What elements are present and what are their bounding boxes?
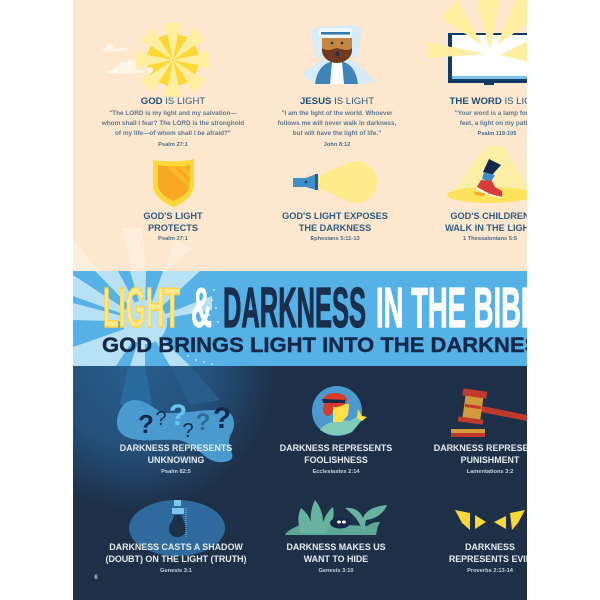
text block: the Word is light: "Your word is a lamp for my	[455, 110, 540, 117]
text block: darkness represents foolishness	[280, 444, 392, 473]
icon: question marks on blob: ?	[182, 420, 194, 442]
text block: darkness represents foolishness: Ecclesiastes 2:14	[312, 469, 360, 475]
icon: question marks on blob: ?	[196, 409, 210, 436]
text block: the Word is light: Psalm 119:105	[478, 131, 516, 137]
text block: darkness represents punishment: DARKNESS REPRESENTS	[434, 443, 546, 453]
text block: God is light: "The LORD is my light and my salvation—	[109, 110, 237, 117]
text block: God's children walk in the light: GOD'S CHILDREN	[450, 211, 530, 221]
text block: darkness makes us want to hide	[287, 544, 386, 572]
text block: darkness casts a shadow: Genesis 3:1	[160, 568, 192, 574]
text block: God is light	[101, 96, 244, 148]
text block: darkness represents punishment	[434, 444, 527, 473]
panel: light section background	[73, 0, 527, 271]
icon: walking foot in light	[447, 146, 533, 203]
icon: question marks on blob: ?	[213, 402, 231, 435]
icon: Jesus	[302, 25, 376, 84]
text block: darkness represents unknowing: UNKNOWING	[148, 455, 204, 465]
text block: God's light protects	[144, 212, 202, 240]
icon: question marks on blob: ?	[155, 408, 167, 430]
text block: darkness makes us want to hide: Genesis 3:10	[318, 568, 354, 574]
text block: darkness represents punishment: PUNISHMENT	[461, 455, 520, 465]
icon: gavel	[451, 388, 527, 437]
text block: Jesus is light: follows me will never walk in darkness,	[278, 120, 397, 127]
icon: question marks on blob	[117, 399, 234, 462]
text block: the Word is light: feet, a light on my path."	[460, 120, 534, 127]
icon: yellow evil eyes	[455, 510, 525, 530]
subtitle: GOD BRINGS LIGHT INTO THE DARKNESS	[102, 333, 554, 357]
text block: the Word is light	[450, 98, 527, 135]
text block: darkness casts a shadow: (DOUBT) ON THE LIGHT (TRUTH)	[106, 554, 247, 564]
text block: darkness represents unknowing: Psalm 82:5	[161, 469, 191, 475]
text block: the Word is light: THE WORD IS LIGHT	[450, 96, 545, 107]
title: Light and Darkness in the Bible	[104, 286, 527, 328]
text block: darkness makes us want to hide: DARKNESS MAKES US	[286, 542, 386, 552]
text block: God's light protects: GOD'S LIGHT	[143, 211, 203, 221]
text block: darkness represents unknowing: DARKNESS REPRESENTS	[120, 443, 232, 453]
icon: sun	[100, 23, 210, 97]
panel: faint rays rising into the light section	[73, 228, 192, 271]
text block: darkness casts a shadow	[106, 544, 246, 572]
text block: God's light exposes the darkness: GOD'S LIGHT EXPOSES	[282, 211, 388, 221]
text block: darkness represents evil	[449, 544, 527, 572]
title: Light and Darkness in the Bible: &	[191, 276, 212, 340]
title: Light and Darkness in the Bible: LIGHT	[103, 276, 180, 340]
icon: shadow of a light bulb	[129, 500, 225, 556]
text block: God's children walk in the light: WALK IN THE LIGHT	[445, 223, 535, 233]
text block: God's light exposes the darkness: Ephesians 5:11-13	[310, 236, 360, 242]
text block: God's light exposes the darkness	[282, 211, 388, 242]
icon: question marks on blob: ?	[169, 399, 187, 432]
text block: God is light: of my life—of whom shall I be afraid?"	[115, 130, 231, 137]
page number: 6	[94, 575, 98, 581]
text block: God's light protects: Psalm 27:1	[158, 236, 188, 242]
text block: darkness casts a shadow: DARKNESS CASTS A SHADOW	[109, 542, 243, 552]
text block: darkness represents evil: REPRESENTS EVIL	[449, 554, 532, 564]
text block: darkness represents evil: Proverbs 2:13-14	[467, 568, 514, 574]
text block: God's light protects: PROTECTS	[148, 223, 198, 233]
text block: God's light exposes the darkness: THE DARKNESS	[299, 223, 371, 233]
icon: eyes hiding in bushes	[285, 500, 387, 535]
icon: open book with rays	[427, 0, 538, 85]
decorative stipple near ampersand	[187, 289, 219, 365]
icon: foolish man with blindfold	[312, 386, 367, 436]
text block: Jesus is light: "I am the light of the world. Whoever	[282, 110, 393, 117]
panel: title banner	[73, 271, 556, 366]
text block: God's children walk in the light: 1 Thessalonians 5:5	[463, 236, 517, 242]
text block: God's children walk in the light	[445, 212, 527, 240]
icon: question marks on blob: ?	[138, 409, 154, 439]
text block: Jesus is light: but will have the light of life."	[293, 130, 381, 137]
text block: Jesus is light: JESUS IS LIGHT	[300, 96, 374, 107]
panel: darkness section background	[73, 366, 527, 600]
text block: God is light: Psalm 27:1	[158, 142, 188, 148]
text block: darkness represents punishment: Lamentations 3:2	[467, 469, 513, 475]
icon: clouds	[100, 44, 153, 74]
text block: God is light: GOD IS LIGHT	[141, 96, 205, 107]
text block: darkness represents foolishness: FOOLISHNESS	[304, 455, 368, 465]
text block: darkness represents evil: DARKNESS	[465, 542, 515, 552]
text block: darkness represents foolishness: DARKNESS REPRESENTS	[280, 443, 392, 453]
icon: flashlight	[293, 161, 377, 203]
text block: Jesus is light	[278, 96, 397, 148]
text block: God is light: whom shall I fear? The LORD is the stronghold	[101, 120, 244, 127]
title: Light and Darkness in the Bible: DARKNESS	[223, 276, 366, 340]
text block: darkness represents unknowing	[120, 444, 232, 473]
icon: shield	[153, 159, 194, 207]
text block: darkness makes us want to hide: WANT TO HIDE	[304, 554, 368, 564]
text block: Jesus is light: John 8:12	[324, 142, 350, 148]
